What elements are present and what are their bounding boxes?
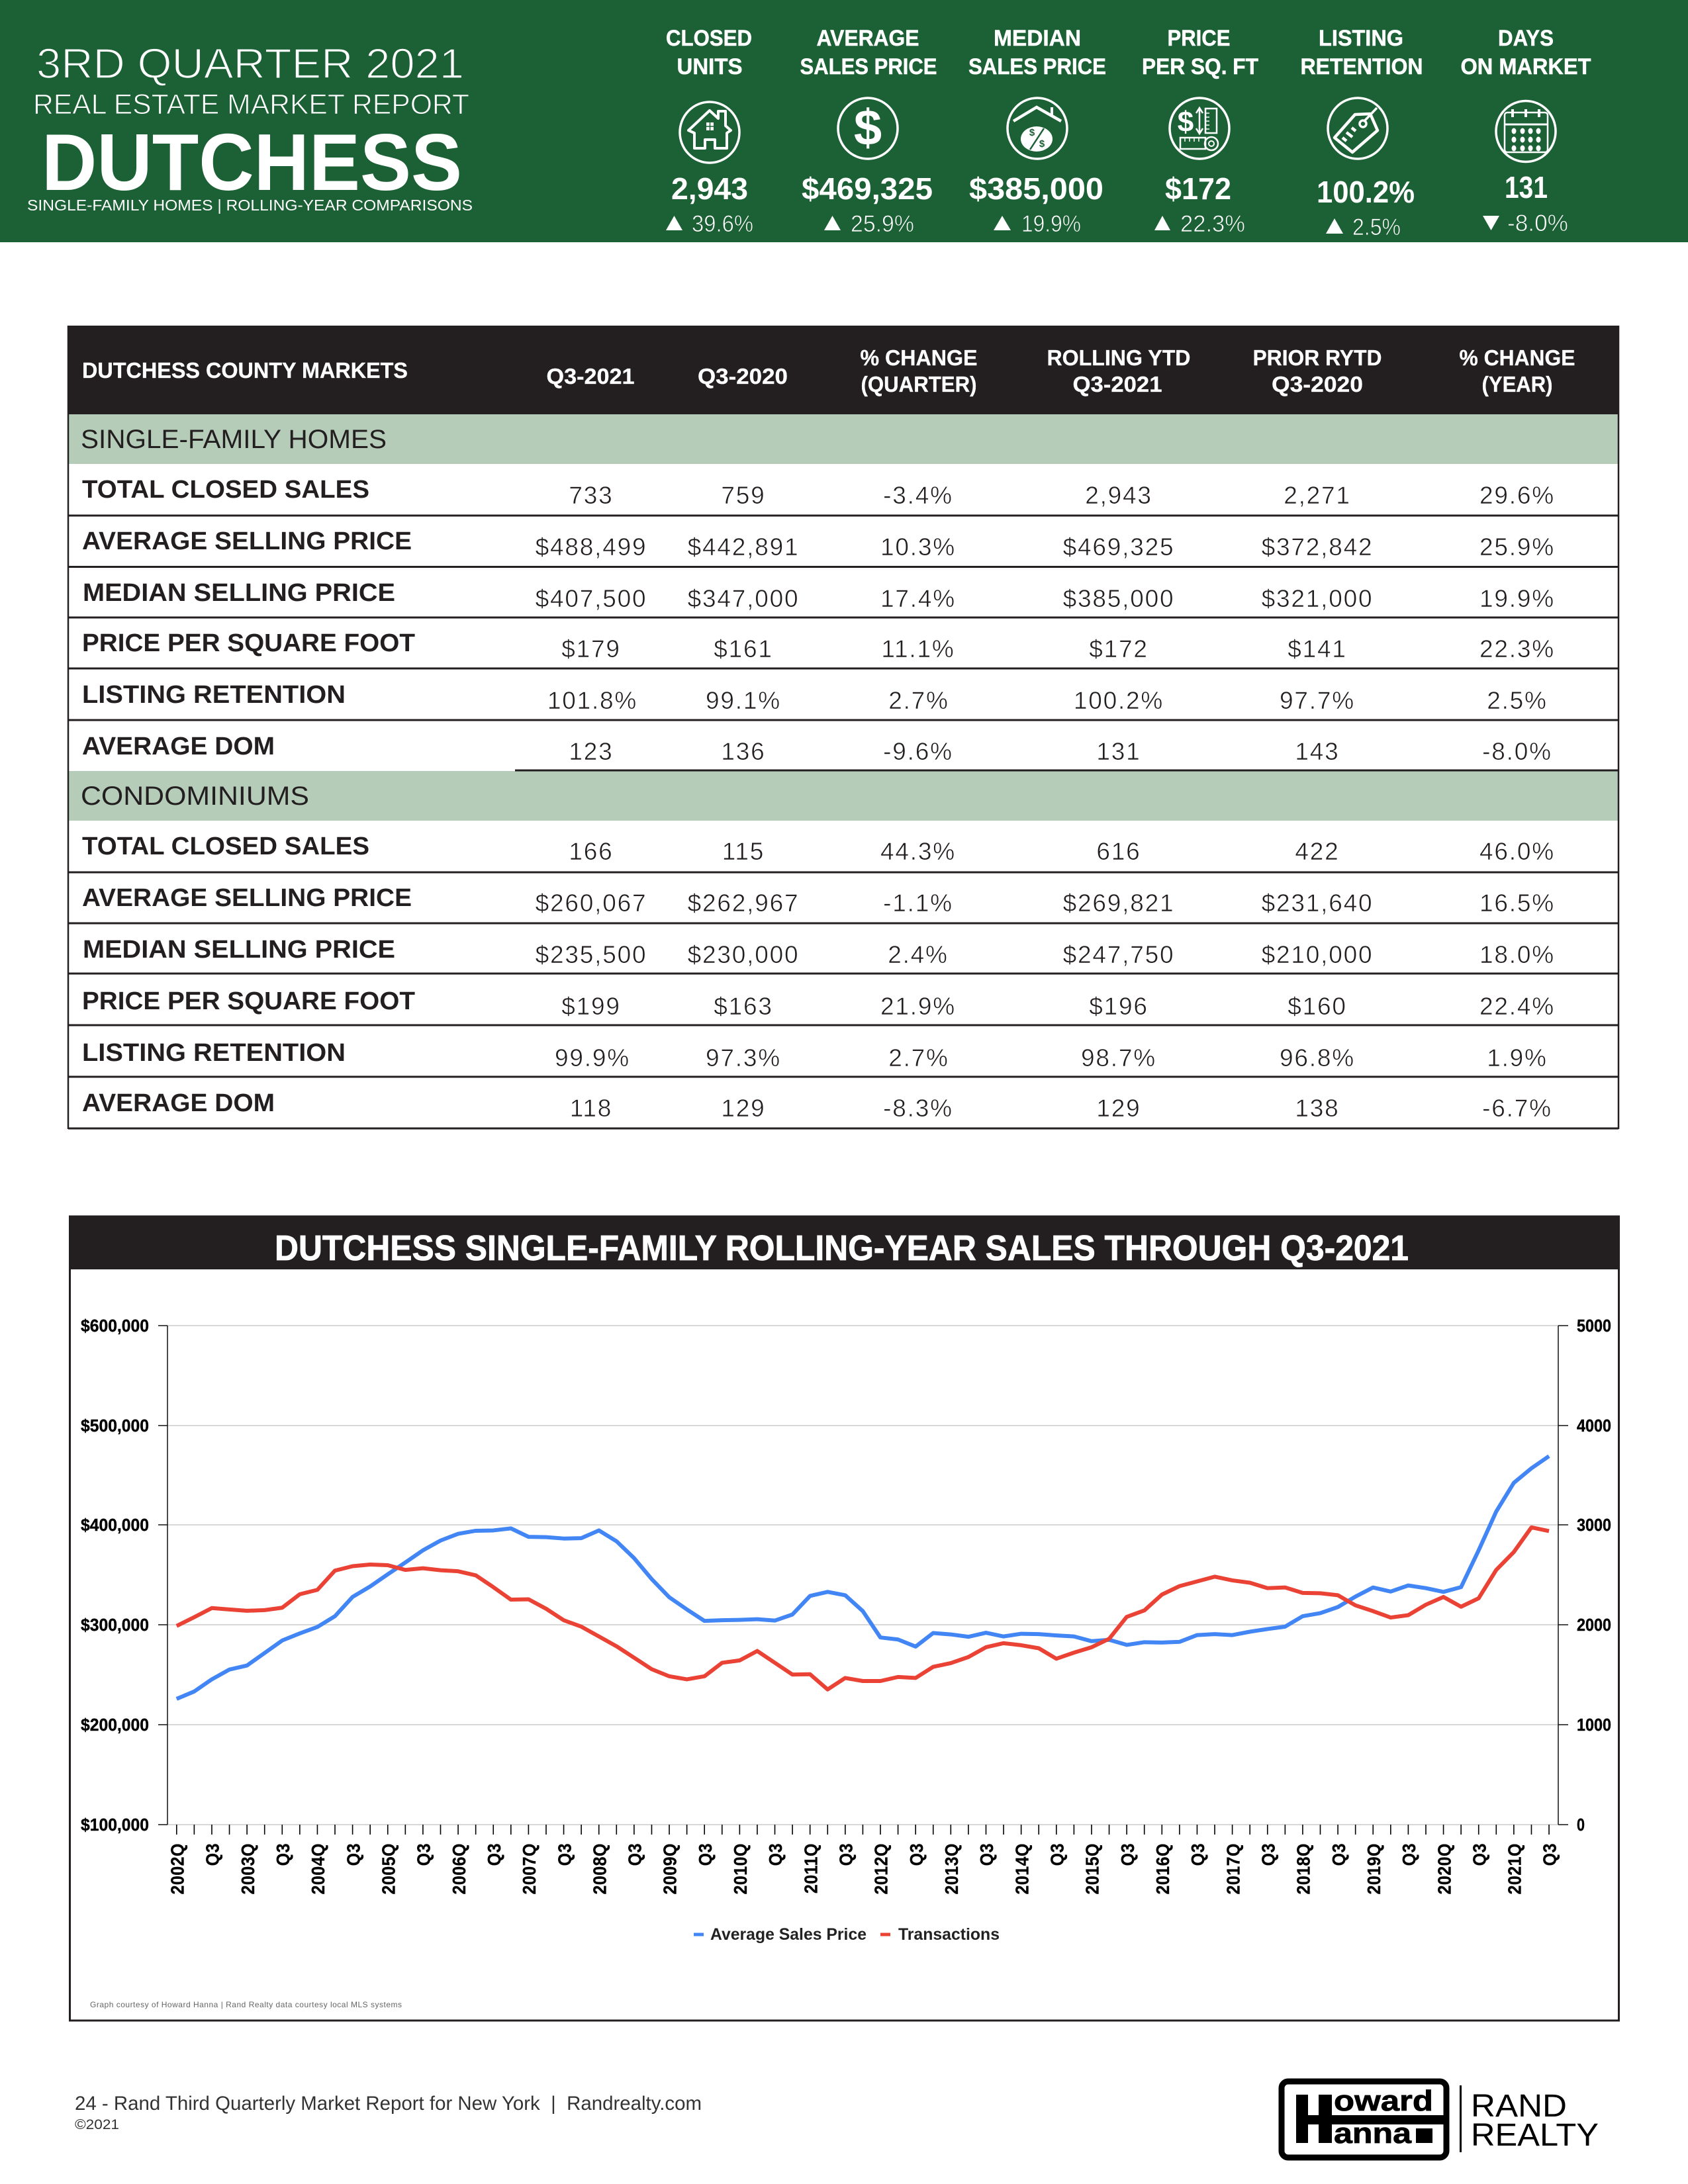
row: SF price per square foot: $161 bbox=[714, 635, 773, 662]
row: SF listing retention bbox=[82, 681, 1548, 714]
row: condo average DOM: -8.3% bbox=[883, 1095, 953, 1122]
x axis labels: 2020Q bbox=[1434, 1843, 1455, 1895]
x axis labels: Q3 bbox=[1047, 1843, 1068, 1866]
table header row: (QUARTER) bbox=[861, 372, 977, 396]
stat: average sales price bbox=[800, 26, 937, 237]
row: SF total closed sales: 2,271 bbox=[1284, 482, 1351, 509]
x axis labels: Q3 bbox=[1188, 1843, 1208, 1866]
icon: dollar bbox=[838, 98, 898, 159]
row: SF price per square foot: $179 bbox=[561, 635, 621, 662]
x axis labels: Q3 bbox=[1328, 1843, 1349, 1866]
x axis labels: 2006Q bbox=[448, 1843, 469, 1895]
table header row bbox=[68, 326, 1619, 414]
table header row: % CHANGE bbox=[1459, 345, 1575, 370]
x axis labels: Q3 bbox=[554, 1843, 575, 1866]
x axis labels: Q3 bbox=[1117, 1843, 1138, 1866]
row: condo total closed sales: 166 bbox=[569, 838, 614, 865]
stat: price per sq ft: $172 bbox=[1165, 171, 1231, 206]
county name: DUTCHESS bbox=[42, 117, 462, 207]
row: condo price per square foot: 22.4% bbox=[1479, 993, 1555, 1020]
stat: price per sq ft bbox=[1142, 26, 1258, 237]
section band: single-family homes bbox=[68, 414, 1618, 464]
row: condo median selling price: $235,500 bbox=[536, 941, 647, 968]
chart legend bbox=[694, 1925, 1000, 1944]
row: condo average DOM: 118 bbox=[570, 1095, 612, 1122]
series: transactions bbox=[177, 1527, 1549, 1690]
row: condo average selling price: $269,821 bbox=[1063, 889, 1174, 917]
right axis labels: 1000 bbox=[1577, 1715, 1611, 1735]
row: condo total closed sales: 44.3% bbox=[880, 838, 956, 865]
stat: closed units: UNITS bbox=[677, 54, 743, 79]
row: condo median selling price: $247,750 bbox=[1063, 941, 1174, 968]
row: SF price per square foot: 22.3% bbox=[1479, 635, 1555, 662]
x axis labels: 2017Q bbox=[1223, 1843, 1244, 1895]
row: SF average DOM: 131 bbox=[1096, 738, 1141, 765]
x axis labels: 2004Q bbox=[308, 1843, 328, 1895]
x axis labels: Q3 bbox=[1539, 1843, 1560, 1866]
row: SF listing retention: 100.2% bbox=[1074, 687, 1164, 714]
stat: median sales price: MEDIAN bbox=[994, 26, 1081, 51]
stat: median sales price: SALES PRICE bbox=[968, 54, 1106, 79]
header band bbox=[0, 0, 1688, 242]
stat: days on market: 131 bbox=[1505, 170, 1548, 205]
chart legend: Transactions bbox=[898, 1925, 1000, 1944]
row: condo average selling price: $262,967 bbox=[688, 889, 799, 917]
x axis labels: 2011Q bbox=[800, 1843, 821, 1893]
footer text bbox=[75, 2093, 702, 2132]
line chart bbox=[81, 1316, 1611, 1895]
row: SF total closed sales: 29.6% bbox=[1479, 482, 1555, 509]
stat: median sales price bbox=[968, 26, 1106, 237]
table header row: Q3-2021 bbox=[547, 364, 634, 388]
market data table bbox=[68, 326, 1619, 1129]
row: SF average DOM: 136 bbox=[721, 738, 766, 765]
x axis labels: 2012Q bbox=[870, 1843, 892, 1895]
row: condo price per square foot: $160 bbox=[1288, 993, 1347, 1020]
row: SF listing retention: 101.8% bbox=[547, 687, 637, 714]
stat: median sales price: 19.9% bbox=[1021, 211, 1081, 237]
x axis labels bbox=[167, 1843, 1560, 1895]
row: condo price per square foot: $196 bbox=[1089, 993, 1149, 1020]
left axis labels: $600,000 bbox=[81, 1316, 149, 1336]
logo: Howard Hanna Rand Realty: oward bbox=[1334, 2085, 1433, 2117]
right axis labels: 0 bbox=[1577, 1815, 1585, 1835]
copyright: ©2021 bbox=[75, 2117, 119, 2132]
row: SF total closed sales: 759 bbox=[721, 482, 766, 509]
left axis labels: $400,000 bbox=[81, 1515, 149, 1535]
left axis labels: $100,000 bbox=[81, 1815, 149, 1835]
table header row: DUTCHESS COUNTY MARKETS bbox=[82, 358, 408, 383]
x axis labels: 2005Q bbox=[378, 1843, 399, 1895]
left axis labels: $500,000 bbox=[81, 1416, 149, 1435]
row: SF price per square foot: $141 bbox=[1288, 635, 1347, 662]
row: condo average DOM: 129 bbox=[721, 1095, 766, 1122]
row: SF listing retention: 2.7% bbox=[888, 687, 949, 714]
row: condo median selling price: 18.0% bbox=[1479, 941, 1555, 968]
stat: average sales price: 25.9% bbox=[851, 211, 914, 237]
right axis labels: 4000 bbox=[1577, 1416, 1611, 1435]
row: SF average DOM: -9.6% bbox=[883, 738, 953, 765]
x axis labels: 2010Q bbox=[730, 1843, 751, 1895]
row: condo average selling price: 16.5% bbox=[1479, 889, 1555, 917]
chart title bar bbox=[70, 1216, 1619, 1269]
row: condo price per square foot: $199 bbox=[561, 993, 621, 1020]
right axis labels: 5000 bbox=[1577, 1316, 1611, 1336]
icon: house price: $ bbox=[1029, 127, 1035, 138]
row: condo average selling price: AVERAGE SELLING PRICE bbox=[82, 884, 412, 912]
row: SF average DOM: 143 bbox=[1295, 738, 1340, 765]
tagline: SINGLE-FAMILY HOMES | ROLLING-YEAR COMPARISONS bbox=[27, 197, 473, 214]
right axis labels: 2000 bbox=[1577, 1615, 1611, 1635]
row: condo average DOM bbox=[82, 1089, 1552, 1122]
x axis labels: 2021Q bbox=[1504, 1843, 1525, 1895]
icon: price tag bbox=[1328, 98, 1387, 159]
chart legend: Average Sales Price bbox=[710, 1925, 867, 1944]
row: SF listing retention: 97.7% bbox=[1280, 687, 1355, 714]
row: SF price per square foot: PRICE PER SQUARE FOOT bbox=[82, 629, 415, 657]
stat: average sales price: SALES PRICE bbox=[800, 54, 937, 79]
row: condo price per square foot: 21.9% bbox=[880, 993, 956, 1020]
stat: listing retention bbox=[1300, 26, 1423, 240]
row: condo listing retention: 98.7% bbox=[1081, 1044, 1156, 1071]
row: SF average DOM: 123 bbox=[569, 738, 614, 765]
row: condo average DOM: 138 bbox=[1295, 1095, 1340, 1122]
row: SF median selling price: MEDIAN SELLING PRICE bbox=[83, 579, 395, 607]
x axis labels: Q3 bbox=[343, 1843, 364, 1866]
right axis labels: 3000 bbox=[1577, 1515, 1611, 1535]
section band: single-family homes: SINGLE-FAMILY HOMES bbox=[81, 425, 387, 454]
x axis labels: 2015Q bbox=[1082, 1843, 1103, 1895]
row: SF average DOM: -8.0% bbox=[1482, 738, 1552, 765]
chart panel bbox=[70, 1216, 1619, 2021]
row: condo average DOM: 129 bbox=[1096, 1095, 1141, 1122]
table header row: (YEAR) bbox=[1481, 372, 1553, 396]
x axis labels: Q3 bbox=[1258, 1843, 1279, 1866]
x axis labels: 2002Q bbox=[167, 1843, 188, 1895]
row: condo total closed sales bbox=[82, 833, 1555, 865]
row: condo total closed sales: 616 bbox=[1096, 838, 1141, 865]
row: condo total closed sales: 46.0% bbox=[1479, 838, 1555, 865]
row: SF listing retention: 99.1% bbox=[706, 687, 781, 714]
subtitle: real estate market report: REAL ESTATE MARKET REPORT bbox=[33, 89, 469, 120]
row: condo total closed sales: TOTAL CLOSED SALES bbox=[82, 833, 369, 860]
icon: house price bbox=[1008, 98, 1067, 159]
section band: condominiums: CONDOMINIUMS bbox=[81, 782, 309, 811]
stat: price per sq ft: 22.3% bbox=[1180, 211, 1245, 237]
stat: listing retention: LISTING bbox=[1319, 26, 1403, 51]
table header row: Q3-2020 bbox=[1272, 372, 1363, 396]
stat: days on market bbox=[1460, 26, 1591, 236]
x axis labels: Q3 bbox=[624, 1843, 645, 1866]
stat: average sales price: AVERAGE bbox=[817, 26, 919, 51]
row: condo price per square foot bbox=[82, 987, 1555, 1020]
stat: days on market: -8.0% bbox=[1507, 210, 1568, 236]
row: SF median selling price: $385,000 bbox=[1063, 585, 1174, 612]
row: condo median selling price: $230,000 bbox=[688, 941, 799, 968]
stat: average sales price: $469,325 bbox=[802, 171, 933, 206]
x axis labels: Q3 bbox=[273, 1843, 293, 1866]
logo: Howard Hanna Rand Realty bbox=[1282, 2081, 1599, 2158]
row: condo price per square foot: $163 bbox=[714, 993, 773, 1020]
row: SF median selling price: 19.9% bbox=[1479, 585, 1555, 612]
x axis labels: Q3 bbox=[765, 1843, 786, 1866]
x axis labels: 2013Q bbox=[941, 1843, 962, 1895]
x axis labels: Q3 bbox=[976, 1843, 998, 1866]
row: SF average selling price: 10.3% bbox=[880, 533, 956, 561]
row: condo price per square foot: PRICE PER SQUARE FOOT bbox=[82, 987, 415, 1015]
series: average sales price bbox=[177, 1456, 1549, 1699]
row: SF total closed sales: 733 bbox=[569, 482, 614, 509]
row: condo total closed sales: 422 bbox=[1295, 838, 1340, 865]
row: SF listing retention: 2.5% bbox=[1487, 687, 1548, 714]
table header row: PRIOR RYTD bbox=[1252, 345, 1382, 370]
row: condo listing retention: 1.9% bbox=[1487, 1044, 1548, 1071]
x axis labels: Q3 bbox=[835, 1843, 857, 1866]
left axis labels: $300,000 bbox=[81, 1615, 149, 1635]
row: SF average selling price: $372,842 bbox=[1262, 533, 1373, 561]
row: condo average DOM: -6.7% bbox=[1482, 1095, 1552, 1122]
x axis labels: 2014Q bbox=[1011, 1843, 1033, 1895]
row: condo listing retention: 97.3% bbox=[706, 1044, 781, 1071]
row: SF total closed sales: TOTAL CLOSED SALES bbox=[82, 476, 369, 504]
stat: listing retention: RETENTION bbox=[1300, 54, 1423, 79]
left axis labels bbox=[81, 1316, 149, 1835]
x axis labels: 2009Q bbox=[659, 1843, 680, 1895]
right axis labels bbox=[1577, 1316, 1611, 1835]
stat: days on market: DAYS bbox=[1498, 26, 1554, 51]
row: SF average selling price: AVERAGE SELLING PRICE bbox=[82, 527, 412, 555]
row: condo median selling price: 2.4% bbox=[888, 941, 949, 968]
table header row: Q3-2021 bbox=[1072, 372, 1162, 396]
stat: median sales price: $385,000 bbox=[969, 171, 1103, 206]
icon: ruler and dollar bbox=[1170, 98, 1229, 159]
row: condo average selling price: $231,640 bbox=[1262, 889, 1373, 917]
logo: Howard Hanna Rand Realty: REALTY bbox=[1471, 2118, 1599, 2153]
row: SF total closed sales bbox=[82, 476, 1555, 509]
stat: price per sq ft: PRICE bbox=[1168, 26, 1230, 51]
row: SF average DOM: AVERAGE DOM bbox=[82, 733, 275, 760]
row: SF average DOM bbox=[82, 733, 1552, 765]
icon: house price: $ bbox=[1039, 138, 1045, 150]
row: condo listing retention: 99.9% bbox=[555, 1044, 630, 1071]
row: condo median selling price: $210,000 bbox=[1262, 941, 1373, 968]
x axis labels: Q3 bbox=[484, 1843, 504, 1866]
x axis labels: 2003Q bbox=[237, 1843, 258, 1895]
icon: ruler and dollar: $ bbox=[1178, 106, 1194, 138]
stat: closed units: 39.6% bbox=[692, 211, 753, 237]
row: condo average selling price bbox=[82, 884, 1555, 917]
stat: listing retention: 2.5% bbox=[1352, 214, 1401, 240]
row: SF total closed sales: 2,943 bbox=[1085, 482, 1152, 509]
row: SF average selling price: $488,499 bbox=[536, 533, 647, 561]
x axis labels: Q3 bbox=[906, 1843, 927, 1866]
row: SF price per square foot bbox=[82, 629, 1555, 662]
row: SF price per square foot: $172 bbox=[1089, 635, 1149, 662]
row: SF average selling price bbox=[82, 527, 1555, 561]
row: condo median selling price bbox=[83, 936, 1555, 968]
stat: closed units bbox=[666, 26, 753, 237]
row: condo average DOM: AVERAGE DOM bbox=[82, 1089, 275, 1117]
chart source note: Graph courtesy of Howard Hanna | Rand Realty data courtesy local MLS systems bbox=[90, 2000, 402, 2009]
row: condo listing retention bbox=[82, 1039, 1548, 1071]
x axis labels: 2019Q bbox=[1364, 1843, 1384, 1895]
x axis labels: Q3 bbox=[202, 1843, 223, 1866]
x axis labels: Q3 bbox=[413, 1843, 434, 1866]
row: condo listing retention: 96.8% bbox=[1280, 1044, 1355, 1071]
row: condo listing retention: 2.7% bbox=[888, 1044, 949, 1071]
table header row: Q3-2020 bbox=[698, 364, 788, 388]
stat: price per sq ft: PER SQ. FT bbox=[1142, 54, 1258, 79]
row: SF listing retention: LISTING RETENTION bbox=[82, 681, 346, 709]
row: SF average selling price: $469,325 bbox=[1063, 533, 1174, 561]
left axis labels: $200,000 bbox=[81, 1715, 149, 1735]
row: SF price per square foot: 11.1% bbox=[881, 635, 955, 662]
chart title bar: DUTCHESS SINGLE-FAMILY ROLLING-YEAR SALES THROUGH Q3-2021 bbox=[275, 1228, 1409, 1268]
row: SF median selling price: $347,000 bbox=[688, 585, 799, 612]
stat: closed units: 2,943 bbox=[671, 171, 748, 206]
stat: listing retention: 100.2% bbox=[1317, 175, 1415, 209]
x axis labels: Q3 bbox=[1469, 1843, 1490, 1866]
x axis labels: Q3 bbox=[695, 1843, 716, 1866]
row: condo median selling price: MEDIAN SELLING PRICE bbox=[83, 936, 395, 964]
table header row: ROLLING YTD bbox=[1047, 345, 1190, 370]
row: SF average selling price: 25.9% bbox=[1479, 533, 1555, 561]
row: condo listing retention: LISTING RETENTION bbox=[82, 1039, 346, 1067]
x axis labels: 2007Q bbox=[519, 1843, 539, 1895]
x axis labels: 2016Q bbox=[1152, 1843, 1173, 1895]
row: SF average selling price: $442,891 bbox=[688, 533, 799, 561]
footer text: 24 - Rand Third Quarterly Market Report for New York | Randrealty.com bbox=[75, 2093, 702, 2115]
icon: house bbox=[680, 102, 739, 163]
row: condo average selling price: $260,067 bbox=[536, 889, 647, 917]
x axis labels: 2008Q bbox=[589, 1843, 610, 1895]
logo: Howard Hanna Rand Realty: anna bbox=[1334, 2117, 1412, 2150]
row: condo total closed sales: 115 bbox=[722, 838, 765, 865]
section band: condominiums bbox=[68, 771, 1618, 821]
stat: days on market: ON MARKET bbox=[1460, 54, 1591, 79]
row: condo average selling price: -1.1% bbox=[883, 889, 953, 917]
icon: calendar bbox=[1496, 101, 1556, 161]
row: SF median selling price: $321,000 bbox=[1262, 585, 1373, 612]
stat: closed units: CLOSED bbox=[666, 26, 752, 51]
logo: Howard Hanna Rand Realty: RAND bbox=[1471, 2089, 1567, 2124]
title: 3rd quarter 2021: 3RD QUARTER 2021 bbox=[36, 40, 464, 87]
row: SF median selling price: 17.4% bbox=[880, 585, 956, 612]
row: SF total closed sales: -3.4% bbox=[883, 482, 953, 509]
row: SF median selling price: $407,500 bbox=[536, 585, 647, 612]
row: SF median selling price bbox=[83, 579, 1555, 612]
x axis labels: Q3 bbox=[1399, 1843, 1419, 1866]
icon: dollar: $ bbox=[854, 100, 882, 156]
x axis labels: 2018Q bbox=[1293, 1843, 1314, 1895]
table header row: % CHANGE bbox=[861, 345, 977, 370]
